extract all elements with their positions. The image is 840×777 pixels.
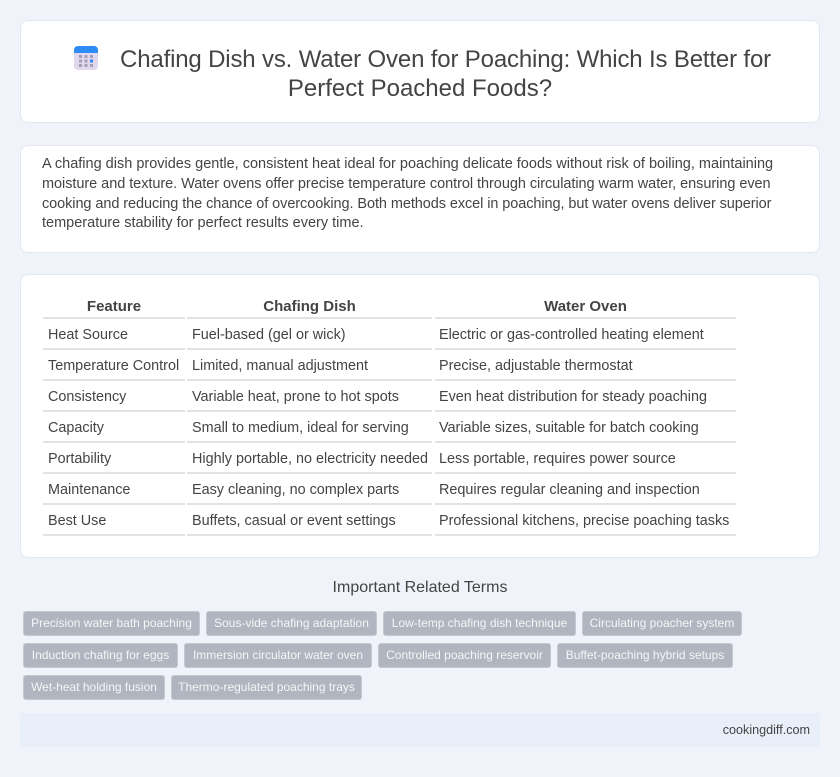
comparison table: Feature	[87, 298, 141, 315]
comparison table: Best Use	[48, 513, 106, 529]
comparison table: Water Oven	[544, 298, 627, 315]
footer bar	[20, 713, 820, 747]
comparison table: Heat Source	[48, 327, 128, 343]
title: Chafing Dish vs. Water Oven for Poaching: Which Is Better for	[120, 46, 771, 73]
title	[120, 46, 771, 102]
comparison table: Limited, manual adjustment	[192, 358, 368, 374]
comparison table: Consistency	[48, 389, 126, 405]
icon: calendar	[74, 46, 98, 70]
comparison table: Small to medium, ideal for serving	[192, 420, 409, 436]
comparison table: Buffets, casual or event settings	[192, 513, 396, 529]
intro paragraph: temperature stability for perfect results every time.	[42, 215, 364, 231]
intro paragraph: cooking and reducing the chance of overcooking. Both methods excel in poaching, but water ovens deliver superior	[42, 196, 771, 212]
related terms tags: Thermo-regulated poaching trays	[178, 680, 355, 694]
comparison table: Less portable, requires power source	[439, 451, 676, 467]
panel: title card	[20, 20, 820, 123]
comparison table: Requires regular cleaning and inspection	[439, 482, 700, 498]
title: Perfect Poached Foods?	[288, 75, 552, 102]
comparison table: Variable heat, prone to hot spots	[192, 389, 399, 405]
comparison table: Chafing Dish	[263, 298, 356, 315]
comparison table: Electric or gas-controlled heating element	[439, 327, 704, 343]
comparison table: Portability	[48, 451, 111, 467]
related terms tags: Sous-vide chafing adaptation	[214, 616, 369, 630]
comparison table: Easy cleaning, no complex parts	[192, 482, 399, 498]
footer source: cookingdiff.com	[723, 723, 810, 737]
related terms tags: Wet-heat holding fusion	[31, 680, 157, 694]
comparison table: Professional kitchens, precise poaching tasks	[439, 513, 729, 529]
related terms tags: Buffet-poaching hybrid setups	[566, 648, 724, 662]
comparison table: Capacity	[48, 420, 104, 436]
comparison table: Temperature Control	[48, 358, 179, 374]
related terms tags: Immersion circulator water oven	[193, 648, 363, 662]
comparison table: Precise, adjustable thermostat	[439, 358, 633, 374]
intro paragraph: A chafing dish provides gentle, consistent heat ideal for poaching delicate foods without risk of boiling, maintaining	[42, 156, 773, 172]
comparison table: Highly portable, no electricity needed	[192, 451, 428, 467]
comparison table	[43, 298, 736, 536]
related terms tags: Controlled poaching reservoir	[386, 648, 543, 662]
related terms tags	[23, 611, 742, 700]
related terms tags: Circulating poacher system	[590, 616, 734, 630]
intro paragraph: moisture and texture. Water ovens offer precise temperature control through circulating warm water, ensuring even	[42, 176, 771, 192]
related terms tags: Precision water bath poaching	[31, 616, 192, 630]
comparison table: Even heat distribution for steady poaching	[439, 389, 707, 405]
comparison table: Maintenance	[48, 482, 130, 498]
intro paragraph	[42, 156, 773, 231]
panel: comparison table card	[20, 274, 820, 558]
heading: related terms: Important Related Terms	[333, 579, 507, 596]
comparison table: Variable sizes, suitable for batch cooking	[439, 420, 699, 436]
related terms tags: Induction chafing for eggs	[32, 648, 169, 662]
comparison table: Fuel-based (gel or wick)	[192, 327, 346, 343]
panel: intro text card	[20, 145, 820, 253]
related terms tags: Low-temp chafing dish technique	[392, 616, 567, 630]
